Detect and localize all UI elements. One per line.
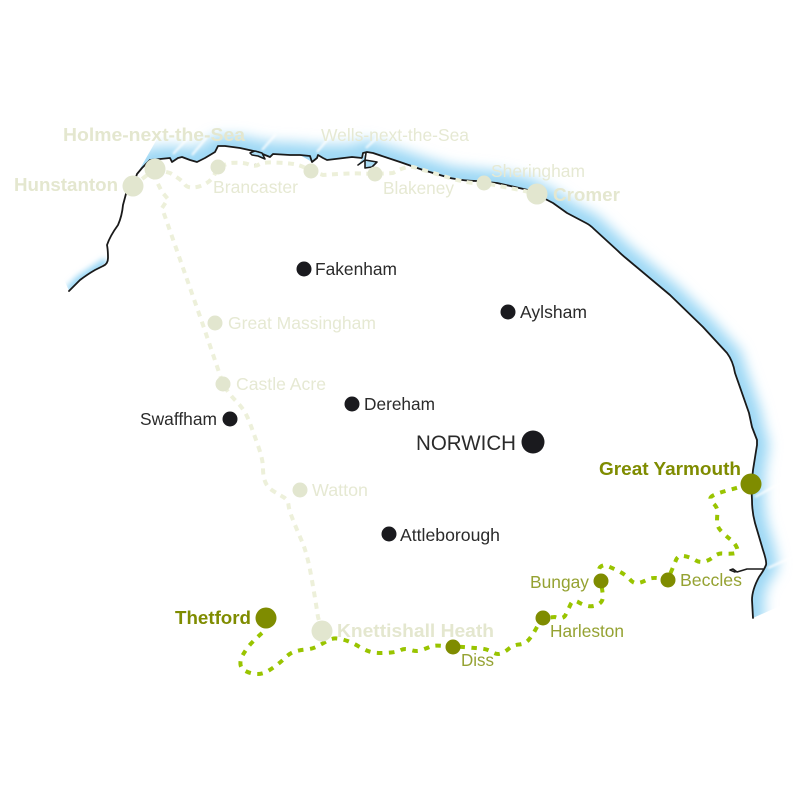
place labels: Cromer [553,185,620,205]
place labels: Dereham [364,394,435,414]
place labels [14,125,742,670]
place labels: Swaffham [140,409,217,429]
place labels: Attleborough [400,525,500,545]
place labels: Diss [461,650,494,670]
place labels: Harleston [550,621,624,641]
place labels: Sheringham [491,161,585,181]
place labels: Blakeney [383,178,454,198]
angles way route (green) [240,484,751,674]
creek mark [254,164,258,166]
sea glow along the coast [137,133,795,625]
coastal and peddars way route (pale) [133,162,537,631]
place labels: Great Massingham [228,313,376,333]
sea glow along the Wash [69,262,107,291]
coastline [69,146,766,618]
place labels: Bungay [530,572,589,592]
place labels: Great Yarmouth [599,459,741,479]
place labels: Watton [312,480,368,500]
place labels: Fakenham [315,259,397,279]
place labels: Beccles [680,570,742,590]
place labels: Castle Acre [236,374,326,394]
place labels: Wells-next-the-Sea [321,125,469,145]
place labels: NORWICH [416,432,516,455]
place labels: Holme-next-the-Sea [63,125,246,145]
pale stops [122,158,548,642]
place labels: Brancaster [213,177,298,197]
place labels: Thetford [175,608,251,628]
towns (black) [222,262,544,542]
map of Norfolk [15,128,786,676]
place labels: Knettishall Heath [337,621,494,641]
place labels: Aylsham [520,302,587,322]
green stops [256,474,762,654]
place labels: Hunstanton [14,175,118,195]
